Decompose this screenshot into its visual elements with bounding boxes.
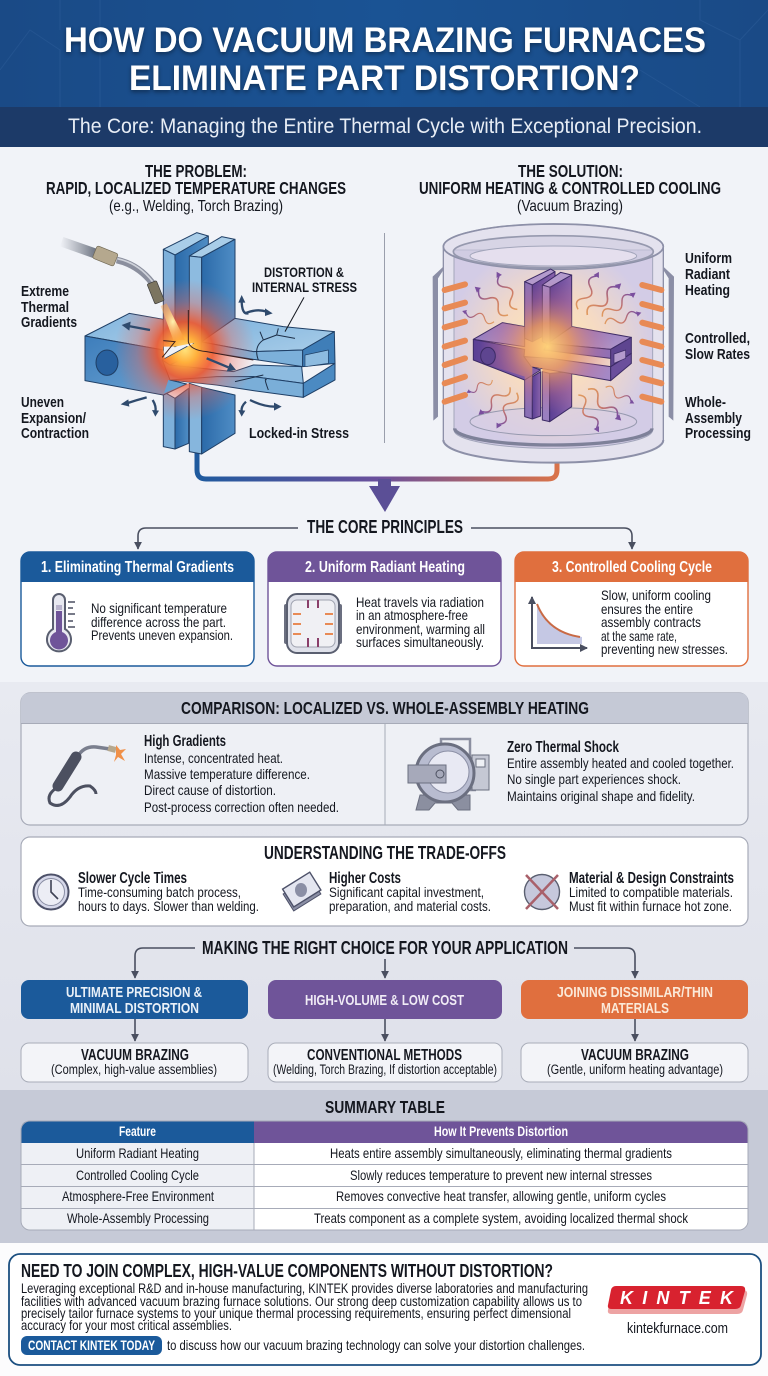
icon: furnace chamber [284, 594, 342, 653]
result: vacuum brazing 2: VACUUM BRAZING [581, 1047, 689, 1064]
choice: high volume: HIGH-VOLUME & LOW COST [305, 992, 464, 1009]
heading: making the right choice: MAKING THE RIGHT CHOICE FOR YOUR APPLICATION [202, 938, 568, 958]
text: surfaces simultaneously. [356, 634, 484, 650]
website: kintekfurnace.com [627, 1321, 728, 1337]
label: uneven expansion: Uneven [21, 394, 64, 411]
label: locked-in stress: Locked-in Stress [249, 425, 349, 442]
text: difference across the part. [91, 614, 226, 630]
lower plates [163, 383, 235, 454]
paragraph [21, 1281, 588, 1333]
icon: thermometer [47, 594, 75, 651]
icon: clock [34, 874, 68, 910]
text: high gradients: High Gradients [144, 733, 226, 750]
paragraph: precisely tailor furnace systems to your unique thermal processing requirements, ensuring perfect dimensional [21, 1306, 571, 1321]
text: higher costs: preparation, and material costs. [329, 898, 491, 914]
purple part [473, 269, 631, 422]
result: vacuum brazing 1: (Complex, high-value assemblies) [51, 1062, 217, 1077]
paragraph: facilities with advanced vacuum brazing furnace solutions. Our strong deep customization capability allows us to [21, 1294, 582, 1309]
row 1: Heats entire assembly simultaneously, eliminating thermal gradients [330, 1145, 672, 1161]
text [356, 594, 485, 650]
table: summary: How It Prevents Distortion [434, 1124, 568, 1139]
arrows to choice boxes [135, 948, 635, 1041]
label: whole-assembly processing: Assembly [685, 410, 743, 427]
panel: principle 1 [21, 552, 254, 666]
text: preventing new stresses. [601, 641, 728, 657]
icon: vacuum furnace machine [408, 739, 489, 810]
illustration: welded part with torch [62, 233, 335, 454]
heating rods [445, 284, 661, 402]
text: high gradients: Post-process correction often needed. [144, 799, 339, 815]
row 3: Removes convective heat transfer, allowing gentle, uniform cycles [336, 1188, 666, 1204]
connector from both illustrations [197, 451, 557, 479]
text: in an atmosphere-free [356, 607, 468, 623]
label: whole-assembly processing: Processing [685, 425, 751, 442]
text [91, 600, 233, 643]
label: controlled slow rates: Controlled, [685, 330, 750, 347]
choice: joining dissimilar [521, 980, 748, 1019]
solution heading: THE SOLUTION: [518, 161, 623, 181]
button: contact: CONTACT KINTEK TODAY [28, 1337, 155, 1353]
panel: call to action: NEED TO JOIN COMPLEX, HIGH-VALUE COMPONENTS WITHOUT DISTORTION? [21, 1261, 553, 1281]
text: slower cycle times: Time-consuming batch process, [78, 884, 241, 900]
label: whole-assembly processing: Whole- [685, 394, 726, 411]
row 1 [76, 1145, 672, 1161]
label: extreme thermal gradients: Gradients [21, 314, 77, 331]
panel: comparison [21, 693, 748, 825]
panel: call to action: to discuss how our vacuum brazing technology can solve your distortion challenges. [167, 1337, 585, 1353]
label: uniform radiant heating: Uniform [685, 250, 732, 267]
horizontal block [85, 313, 335, 397]
choice: ultimate precision: MINIMAL DISTORTION [70, 1000, 199, 1017]
icon: banknotes [283, 872, 321, 911]
text: at the same rate, [601, 628, 677, 644]
panel: comparison: COMPARISON: LOCALIZED VS. WHOLE-ASSEMBLY HEATING [181, 698, 589, 718]
label: controlled slow rates [685, 330, 750, 363]
callout leader [285, 297, 304, 332]
subtitle band: The Core: Managing the Entire Thermal Cycle with Exceptional Precision. [68, 115, 702, 138]
problem heading: RAPID, LOCALIZED TEMPERATURE CHANGES [46, 178, 346, 198]
icon: down arrow to core principles [369, 479, 400, 512]
row 2: Controlled Cooling Cycle [76, 1167, 199, 1183]
label: uniform radiant heating: Radiant [685, 266, 730, 283]
panel: principle 2: 2. Uniform Radiant Heating [305, 559, 465, 576]
flame [161, 303, 185, 340]
chamber [443, 224, 663, 463]
text: No significant temperature [91, 600, 227, 616]
problem heading: (e.g., Welding, Torch Brazing) [109, 198, 283, 215]
label: distortion and internal stress [252, 264, 357, 295]
text: ensures the entire [601, 601, 693, 617]
main title: ELIMINATE PART DISTORTION? [129, 59, 640, 98]
paragraph: accuracy for your most critical assemblies. [21, 1318, 232, 1333]
text: material and design constraints: Limited to compatible materials. [569, 884, 733, 900]
result: conventional methods: CONVENTIONAL METHODS [307, 1047, 462, 1064]
icon: cooling curve [528, 596, 588, 652]
text: high gradients: Massive temperature difference. [144, 766, 310, 782]
result: conventional methods: (Welding, Torch Brazing, If distortion acceptable) [273, 1062, 497, 1077]
main title: HOW DO VACUUM BRAZING FURNACES [64, 21, 706, 60]
stress arrows [121, 295, 282, 417]
text: slower cycle times: Slower Cycle Times [78, 870, 187, 887]
text: assembly contracts [601, 614, 701, 630]
row 2 [76, 1167, 652, 1183]
button: contact [21, 1336, 162, 1355]
text: zero thermal shock: Maintains original shape and fidelity. [507, 788, 695, 804]
panel: principle 2 [268, 552, 501, 666]
label: distortion and internal stress: INTERNAL STRESS [252, 279, 357, 295]
text: high gradients: Intense, concentrated heat. [144, 750, 283, 766]
row 3: Atmosphere-Free Environment [62, 1188, 214, 1204]
text: zero thermal shock: No single part experiences shock. [507, 771, 681, 787]
label: uniform radiant heating: Heating [685, 282, 730, 299]
table: summary [21, 1121, 748, 1230]
solution heading: (Vacuum Brazing) [517, 198, 623, 215]
text: material and design constraints [569, 870, 734, 914]
label: uneven expansion: Contraction [21, 425, 89, 442]
panel: principle 1: 1. Eliminating Thermal Gradients [41, 559, 234, 576]
label: uneven expansion [21, 394, 89, 442]
main title [64, 21, 706, 98]
label: uniform radiant heating [685, 250, 732, 299]
table: summary: Feature [119, 1124, 156, 1139]
icon: welding torch [49, 745, 126, 805]
label: extreme thermal gradients: Extreme [21, 283, 69, 300]
torch hose [62, 242, 97, 254]
row 4: Whole-Assembly Processing [67, 1210, 209, 1226]
label: whole-assembly processing [685, 394, 751, 442]
text: slower cycle times: hours to days. Slower than welding. [78, 898, 259, 914]
label: extreme thermal gradients [21, 283, 77, 331]
heading: summary table: SUMMARY TABLE [325, 1097, 445, 1117]
row 1: Uniform Radiant Heating [76, 1145, 199, 1161]
panel: principle 3: 3. Controlled Cooling Cycle [552, 559, 712, 576]
icon: crossed circle [524, 874, 560, 910]
bolt hole [481, 347, 495, 365]
text: higher costs: Significant capital investment, [329, 884, 484, 900]
row 3 [62, 1188, 666, 1204]
radiant waves [461, 269, 643, 434]
choice: ultimate precision: ULTIMATE PRECISION & [66, 984, 202, 1001]
choice: ultimate precision [21, 980, 248, 1019]
label: extreme thermal gradients: Thermal [21, 299, 69, 316]
problem heading: THE PROBLEM: [145, 161, 247, 181]
problem heading [46, 161, 346, 215]
panel: trade-offs [21, 837, 748, 926]
heat glow [118, 282, 253, 418]
subtitle band [0, 107, 768, 147]
arrows to principle cards [138, 528, 632, 549]
text [601, 587, 728, 657]
text: slower cycle times [78, 870, 259, 914]
choice: joining dissimilar: JOINING DISSIMILAR/THIN [557, 984, 713, 1001]
text: Heat travels via radiation [356, 594, 484, 610]
outer shields [433, 267, 674, 421]
label: controlled slow rates: Slow Rates [685, 346, 750, 363]
text: zero thermal shock [507, 739, 734, 804]
row 2: Slowly reduces temperature to prevent new internal stresses [350, 1167, 652, 1183]
upper plates [163, 233, 235, 350]
result: vacuum brazing 2: (Gentle, uniform heating advantage) [547, 1062, 723, 1077]
weld seam lines [162, 310, 253, 360]
label: distortion and internal stress: DISTORTION & [264, 264, 344, 280]
result: vacuum brazing 2 [521, 1043, 748, 1082]
result: vacuum brazing 1: VACUUM BRAZING [81, 1047, 189, 1064]
panel: call to action [9, 1254, 761, 1365]
illustration: vacuum furnace [433, 224, 674, 463]
text: higher costs: Higher Costs [329, 870, 401, 887]
row 4 [67, 1210, 689, 1226]
solution heading [419, 161, 721, 215]
text: high gradients: Direct cause of distortion. [144, 782, 276, 798]
paragraph: Leveraging exceptional R&D and in-house manufacturing, KINTEK provides diverse laboratories and manufacturing [21, 1281, 588, 1296]
text: Slow, uniform cooling [601, 587, 711, 603]
bolt hole [96, 350, 118, 375]
text: high gradients [144, 733, 339, 815]
result: conventional methods [268, 1043, 502, 1082]
text: higher costs [329, 870, 491, 914]
row 4: Treats component as a complete system, avoiding localized thermal shock [314, 1210, 689, 1226]
heading: core principles: THE CORE PRINCIPLES [307, 517, 463, 537]
label: uneven expansion: Expansion/ [21, 410, 87, 427]
text: environment, warming all [356, 621, 485, 637]
logo: KINTEK: KINTEK [620, 1288, 735, 1308]
choice: high volume [268, 980, 502, 1019]
choice: joining dissimilar: MATERIALS [601, 1000, 669, 1017]
logo: KINTEK [608, 1286, 747, 1314]
cracks [235, 328, 295, 390]
text: Prevents uneven expansion. [91, 627, 233, 643]
text: material and design constraints: Must fit within furnace hot zone. [569, 898, 732, 914]
panel: trade-offs: UNDERSTANDING THE TRADE-OFFS [264, 843, 506, 863]
text: zero thermal shock: Zero Thermal Shock [507, 739, 619, 756]
panel: principle 3 [515, 552, 748, 666]
header band [0, 0, 768, 107]
result: vacuum brazing 1 [21, 1043, 248, 1082]
